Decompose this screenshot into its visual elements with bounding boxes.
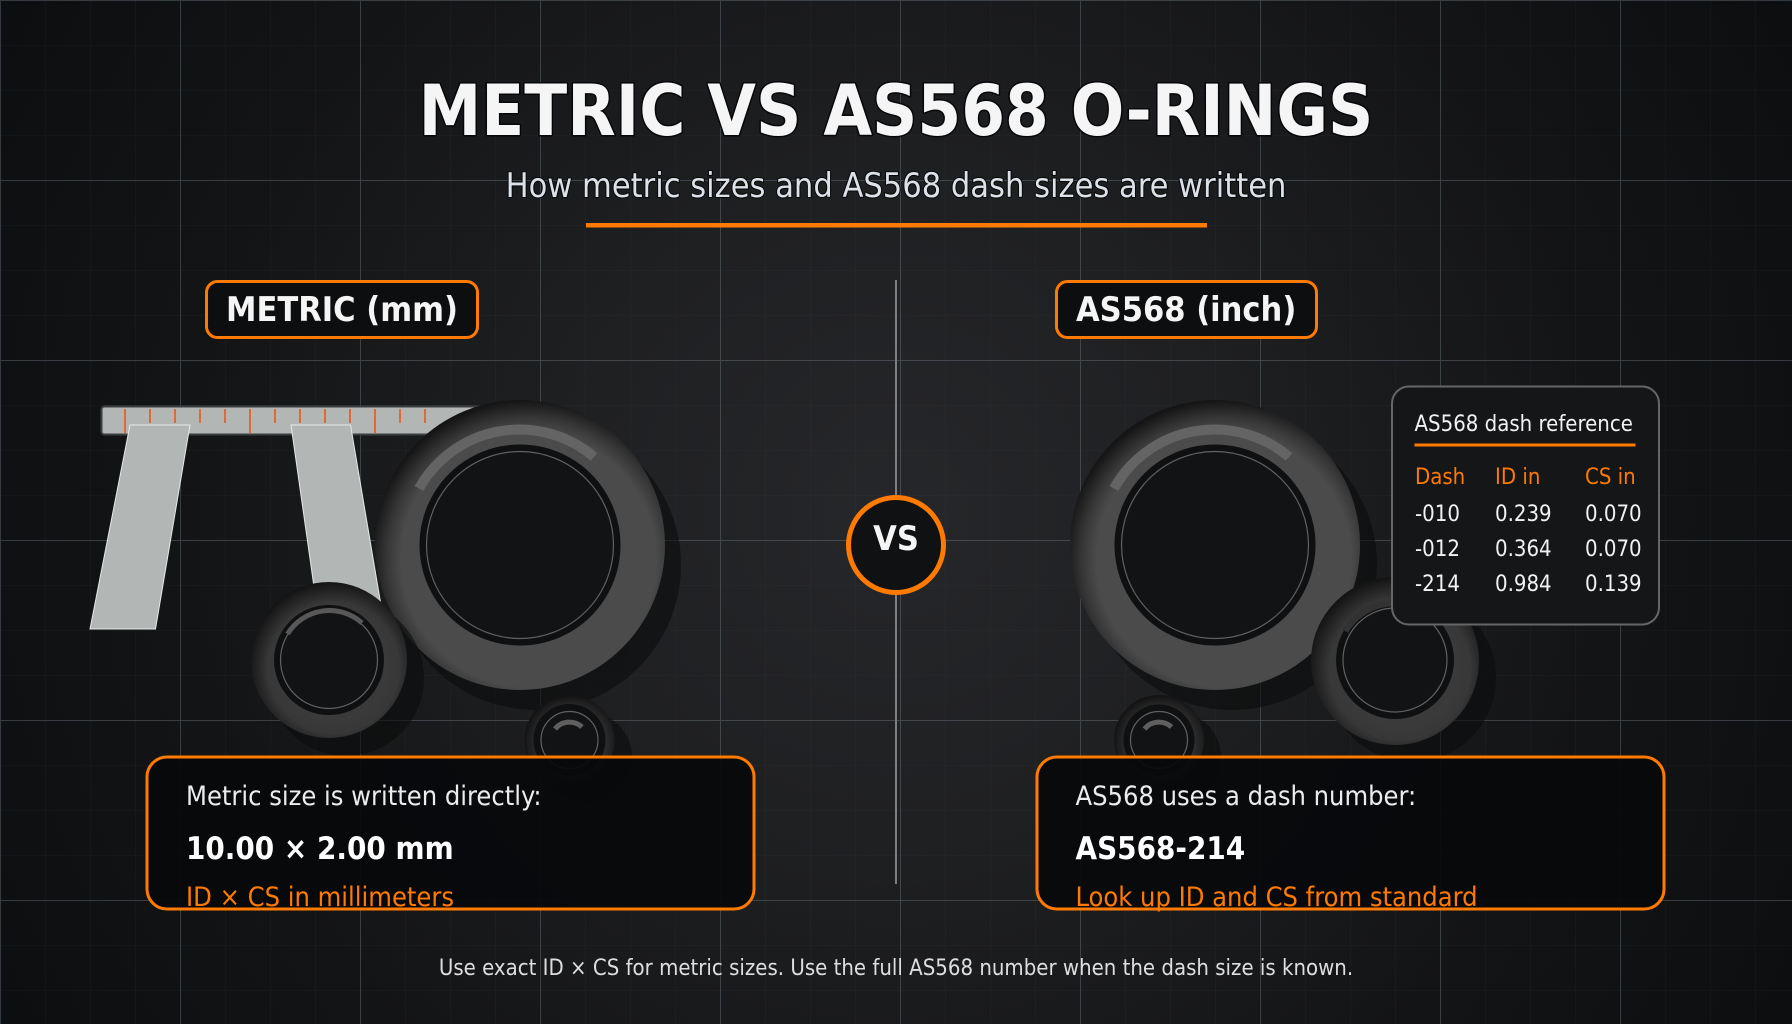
panel: metric explanation: ID × CS in millimeters [186,882,454,913]
vs badge [848,498,944,592]
card: as568 dash reference table [1392,386,1659,624]
table rows: 0.239 [1495,502,1552,527]
o-ring: metric small [524,695,632,802]
table rows: -012 [1415,537,1460,562]
o-ring: as568 small [1114,695,1221,802]
panel: metric explanation: Metric size is written directly: [186,781,542,812]
heading: as568 [1056,282,1316,338]
o-ring: as568 large [1070,400,1377,710]
heading: metric: METRIC (mm) [226,290,458,330]
vs badge: VS [873,519,919,559]
panel: as568 explanation: AS568-214 [1076,831,1245,867]
table header: ID in [1495,465,1540,490]
heading: metric [206,282,478,338]
o-ring: as568 medium [1311,577,1496,762]
caliper beam [102,406,532,434]
table rows: 0.139 [1585,572,1642,597]
caliper illustration [90,406,532,629]
o-ring: metric medium [251,582,424,756]
right jaw [291,425,385,629]
footer note: Use exact ID × CS for metric sizes. Use the full AS568 number when the dash size is known. [439,956,1353,981]
table header: CS in [1585,465,1636,490]
subtitle: How metric sizes and AS568 dash sizes are written [506,166,1286,206]
table rows: 0.070 [1585,537,1642,562]
panel: as568 explanation: AS568 uses a dash number: [1076,781,1416,812]
panel: metric explanation: 10.00 × 2.00 mm [186,831,454,867]
title: METRIC VS AS568 O-RINGS [419,70,1373,152]
o-ring: metric large [375,400,681,710]
table rows: 0.070 [1585,502,1642,527]
heading: as568: AS568 (inch) [1076,290,1296,330]
panel: as568 explanation [1037,757,1664,913]
title underline [586,223,1207,228]
scale ticks [125,409,425,433]
center divider [895,280,897,884]
left jaw [90,425,190,629]
table rows: 0.984 [1495,572,1552,597]
table header [1415,465,1636,490]
panel: as568 explanation: Look up ID and CS from standard [1076,882,1478,913]
table rows: 0.364 [1495,537,1552,562]
card: as568 dash reference table: AS568 dash reference [1414,412,1633,437]
panel: metric explanation [147,757,754,913]
table header: Dash [1415,465,1465,490]
table rows: -214 [1415,572,1460,597]
table rows: -010 [1415,502,1460,527]
table rows [1415,502,1642,597]
